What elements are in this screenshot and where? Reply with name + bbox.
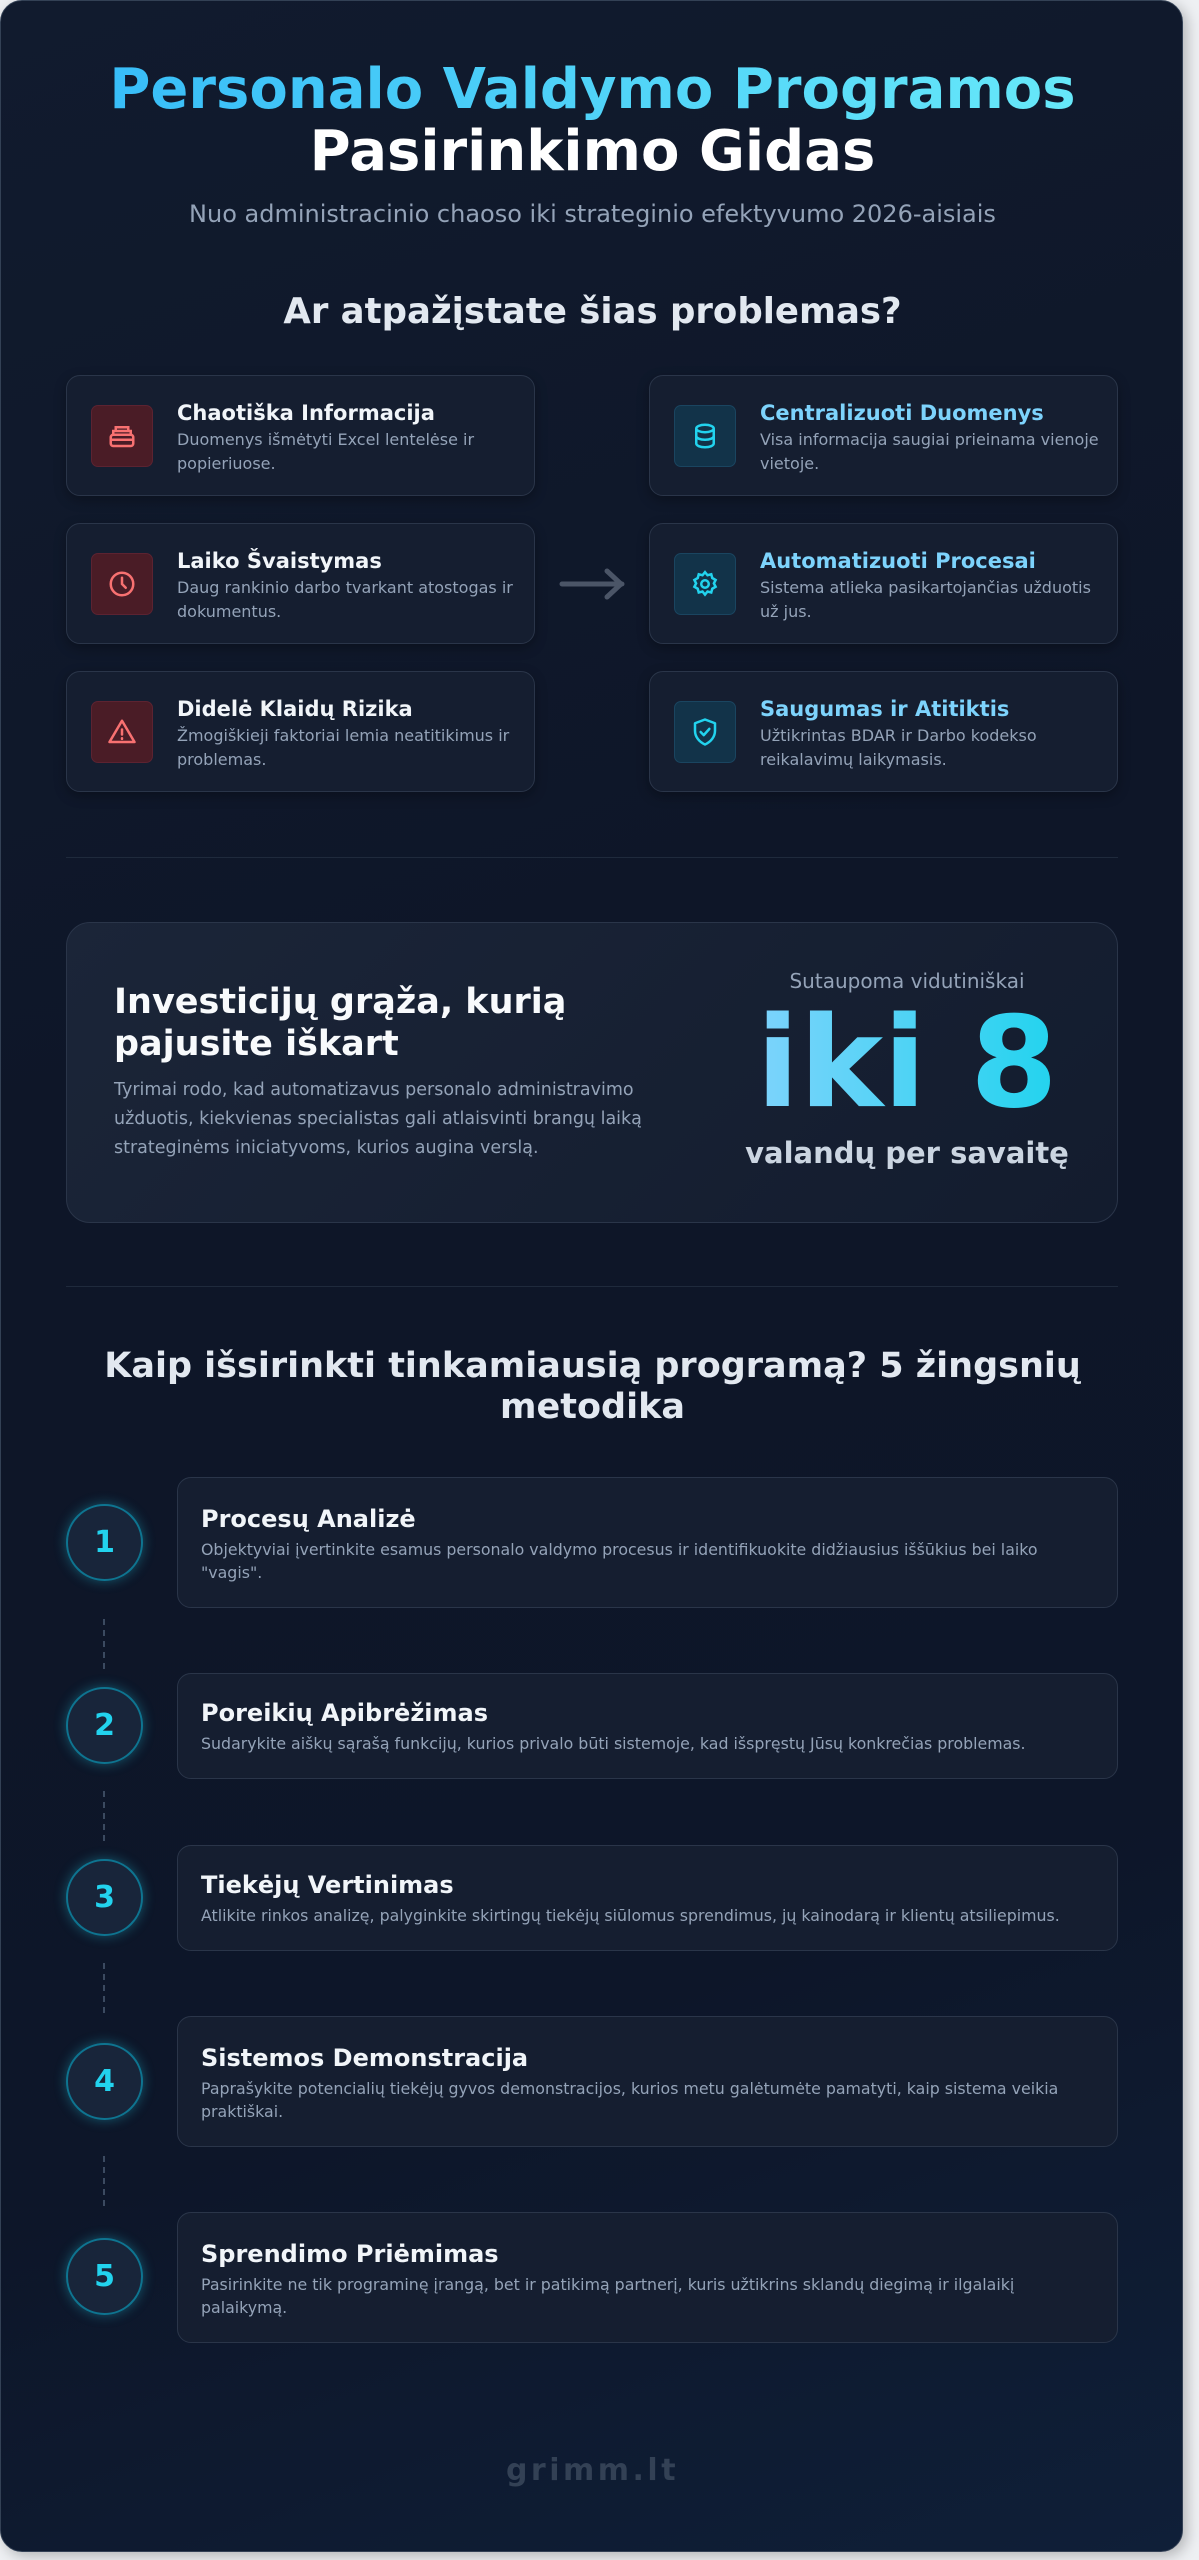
icon: database xyxy=(674,405,736,467)
heading: problems: Ar atpažįstate šias problemas? xyxy=(283,291,902,332)
step 4 xyxy=(60,2016,1118,2147)
panel: problem 1 xyxy=(66,375,535,496)
subtitle: Nuo administracinio chaoso iki strateginio efektyvumo 2026-aisiais xyxy=(189,200,996,228)
panel: problem 2: Laiko Švaistymas xyxy=(177,549,382,573)
step 2 xyxy=(60,1673,1118,1779)
heading: steps: Kaip išsirinkti tinkamiausią programą? 5 žingsnių xyxy=(104,1346,1081,1386)
panel: problem 1: Duomenys išmėtyti Excel lentelėse ir popieriuose. xyxy=(177,430,474,473)
panel: problem 3 xyxy=(66,671,535,792)
step 3: Atlikite rinkos analizę, palyginkite skirtingų tiekėjų siūlomus sprendimus, jų kainodarą ir klientų atsiliepimus. xyxy=(201,1906,1060,1925)
title xyxy=(109,57,1076,184)
panel: solution 2: Sistema atlieka pasikartojančias užduotis už jus. xyxy=(760,578,1091,621)
panel: solution 1: Visa informacija saugiai prieinama vienoje vietoje. xyxy=(760,430,1099,473)
panel: ROI xyxy=(66,922,1118,1223)
title: Personalo Valdymo Programos xyxy=(109,57,1076,122)
ROI text: Tyrimai rodo, kad automatizavus personalo administravimo užduotis, kiekvienas specialistas gali atlaisvinti brangų laiką strateginėms iniciatyvoms, kurios augina verslą. xyxy=(114,1080,642,1158)
title: Pasirinkimo Gidas xyxy=(310,119,875,184)
icon: clock xyxy=(91,553,153,615)
panel: solution 1: Centralizuoti Duomenys xyxy=(760,401,1044,425)
heading: steps: metodika xyxy=(500,1387,685,1427)
panel: solution 3: Užtikrintas BDAR ir Darbo kodekso reikalavimų laikymasis. xyxy=(760,726,1037,769)
stat: valandų per savaitę xyxy=(745,1136,1069,1170)
step 2: Poreikių Apibrėžimas xyxy=(201,1699,488,1727)
step 1 xyxy=(60,1477,1118,1608)
panel: problem 2: Daug rankinio darbo tvarkant atostogas ir dokumentus. xyxy=(177,578,513,621)
step 5: 5 xyxy=(94,2259,115,2294)
step 2: Sudarykite aiškų sąrašą funkcijų, kurios privalo būti sistemoje, kad išspręstų Jūsų konkrečias problemas. xyxy=(201,1734,1026,1753)
panel: problem 3: Didelė Klaidų Rizika xyxy=(177,697,413,721)
ROI heading: pajusite iškart xyxy=(114,1024,399,1064)
step 2: 2 xyxy=(94,1708,115,1743)
panel: solution 3: Saugumas ir Atitiktis xyxy=(760,697,1009,721)
panel: problem 1: Chaotiška Informacija xyxy=(177,401,435,425)
icon: archive xyxy=(91,405,153,467)
step 1: Objektyviai įvertinkite esamus personalo valdymo procesus ir identifikuokite didžiausius iššūkius bei laiko "vagis". xyxy=(201,1540,1038,1582)
step 4: Paprašykite potencialių tiekėjų gyvos demonstracijos, kurios metu galėtumėte pamatyti, kaip sistema veikia praktiškai. xyxy=(201,2079,1058,2121)
panel: solution 1 xyxy=(649,375,1118,496)
icon: warning xyxy=(91,701,153,763)
step 4: 4 xyxy=(94,2064,115,2099)
step 5 xyxy=(60,2212,1118,2343)
step 1: 1 xyxy=(94,1525,115,1560)
stat: Sutaupoma vidutiniškai xyxy=(789,969,1025,993)
stat: iki 8 xyxy=(756,989,1058,1136)
ROI heading xyxy=(114,982,566,1064)
step 1: Procesų Analizė xyxy=(201,1505,416,1533)
icon: gear xyxy=(674,553,736,615)
step 3: 3 xyxy=(94,1880,115,1915)
step 5: Sprendimo Priėmimas xyxy=(201,2240,499,2268)
panel: solution 2 xyxy=(649,523,1118,644)
arrow xyxy=(560,568,624,600)
footer: brand: grimm.lt xyxy=(506,2453,679,2488)
icon: shield xyxy=(674,701,736,763)
heading: steps xyxy=(104,1346,1081,1427)
panel: problem 2 xyxy=(66,523,535,644)
stat xyxy=(745,969,1069,1170)
ROI heading: Investicijų grąža, kurią xyxy=(114,982,566,1022)
panel: solution 3 xyxy=(649,671,1118,792)
step 4: Sistemos Demonstracija xyxy=(201,2044,528,2072)
step 5: Pasirinkite ne tik programinę įrangą, bet ir patikimą partnerį, kuris užtikrins sklandų diegimą ir ilgalaikį palaikymą. xyxy=(201,2275,1014,2317)
panel: problem 3: Žmogiškieji faktoriai lemia neatitikimus ir problemas. xyxy=(177,726,509,769)
panel: solution 2: Automatizuoti Procesai xyxy=(760,549,1036,573)
step 3: Tiekėjų Vertinimas xyxy=(201,1871,454,1899)
step 3 xyxy=(60,1845,1118,1951)
